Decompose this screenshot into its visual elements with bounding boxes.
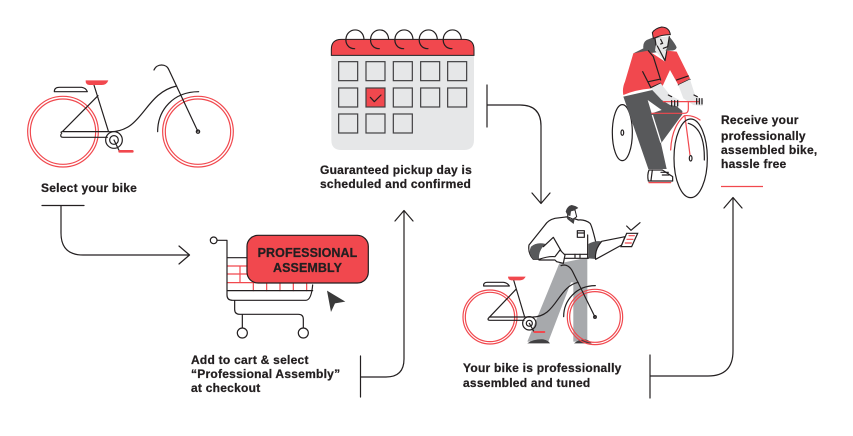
illustration: bike held by mechanic (463, 265, 623, 345)
sleeve cuffs (530, 241, 603, 259)
label: pickup day: Guaranteed pickup day is (320, 163, 472, 177)
button text: PROFESSIONAL (258, 246, 358, 260)
forearms (651, 79, 703, 107)
cart body (217, 240, 313, 327)
pedal (118, 150, 134, 153)
button text: ASSEMBLY (273, 261, 343, 275)
shoe (648, 170, 673, 181)
label: add to cart: “Professional Assembly” (191, 367, 340, 381)
saddle (86, 80, 108, 85)
label: select your bike: Select your bike (41, 181, 137, 195)
cap (652, 27, 670, 38)
arrow: cart to calendar (360, 210, 413, 397)
right arm (595, 237, 625, 259)
rear wheel (28, 96, 98, 167)
label: receive your bike (721, 113, 817, 171)
label: receive your bike: professionally (721, 129, 806, 143)
arrow: assembly to delivery (650, 198, 742, 398)
shirt details (543, 235, 588, 258)
label: add to cart: Add to cart & select (191, 353, 309, 367)
left hand (539, 250, 565, 263)
label: pickup day (320, 163, 472, 191)
torso (623, 51, 690, 95)
illustration: cyclist rear wheel (612, 105, 632, 161)
calendar body (331, 53, 474, 150)
red divider (721, 186, 763, 188)
shirt (529, 217, 596, 259)
hair (633, 37, 677, 53)
illustration: cyclist upper body (623, 27, 703, 107)
pocket (577, 231, 584, 237)
fingers (668, 95, 702, 106)
label: assembled and tuned: Your bike is professionally (463, 361, 622, 375)
label: receive your bike: Receive your (721, 113, 799, 127)
button: professional assembly (247, 235, 368, 283)
wheels (463, 289, 623, 345)
red frame (652, 102, 700, 155)
arrow: bike to cart (42, 206, 190, 264)
neck and face (655, 36, 669, 62)
label: pickup day: scheduled and confirmed (320, 177, 471, 191)
bike frame (54, 65, 199, 137)
date grid (339, 62, 467, 133)
calendar header (331, 39, 474, 55)
label: assembled and tuned (463, 361, 622, 390)
cursor (327, 291, 345, 312)
arrow: calendar to assembly (487, 85, 550, 204)
illustration: cyclist legs (623, 89, 682, 169)
label: assembled and tuned: assembled and tuned (463, 376, 590, 390)
label: add to cart (191, 353, 340, 395)
checked date (366, 88, 385, 107)
illustration: shopping cart (210, 235, 368, 338)
illustration: calendar (331, 30, 474, 150)
label: add to cart: at checkout (191, 381, 260, 395)
illustration: mechanic legs and shoes (527, 258, 592, 343)
illustration: cyclist bicycle (648, 102, 707, 198)
illustration: bicycle to select (28, 65, 233, 167)
handlebar (663, 100, 698, 103)
binding rings (346, 30, 461, 49)
jacket lines (643, 51, 690, 88)
face (568, 210, 577, 219)
front wheel (674, 119, 707, 198)
saddle and pedal (508, 277, 526, 280)
phone (621, 233, 638, 247)
label: receive your bike: assembled bike, (721, 143, 817, 157)
cart grid (227, 266, 313, 291)
button text (258, 246, 358, 275)
cap and beard (566, 205, 578, 224)
check mark (627, 223, 640, 230)
front wheel (163, 96, 233, 167)
frame (484, 265, 595, 320)
label: receive your bike: hassle free (721, 157, 787, 171)
illustration: mechanic upper body (529, 205, 640, 263)
